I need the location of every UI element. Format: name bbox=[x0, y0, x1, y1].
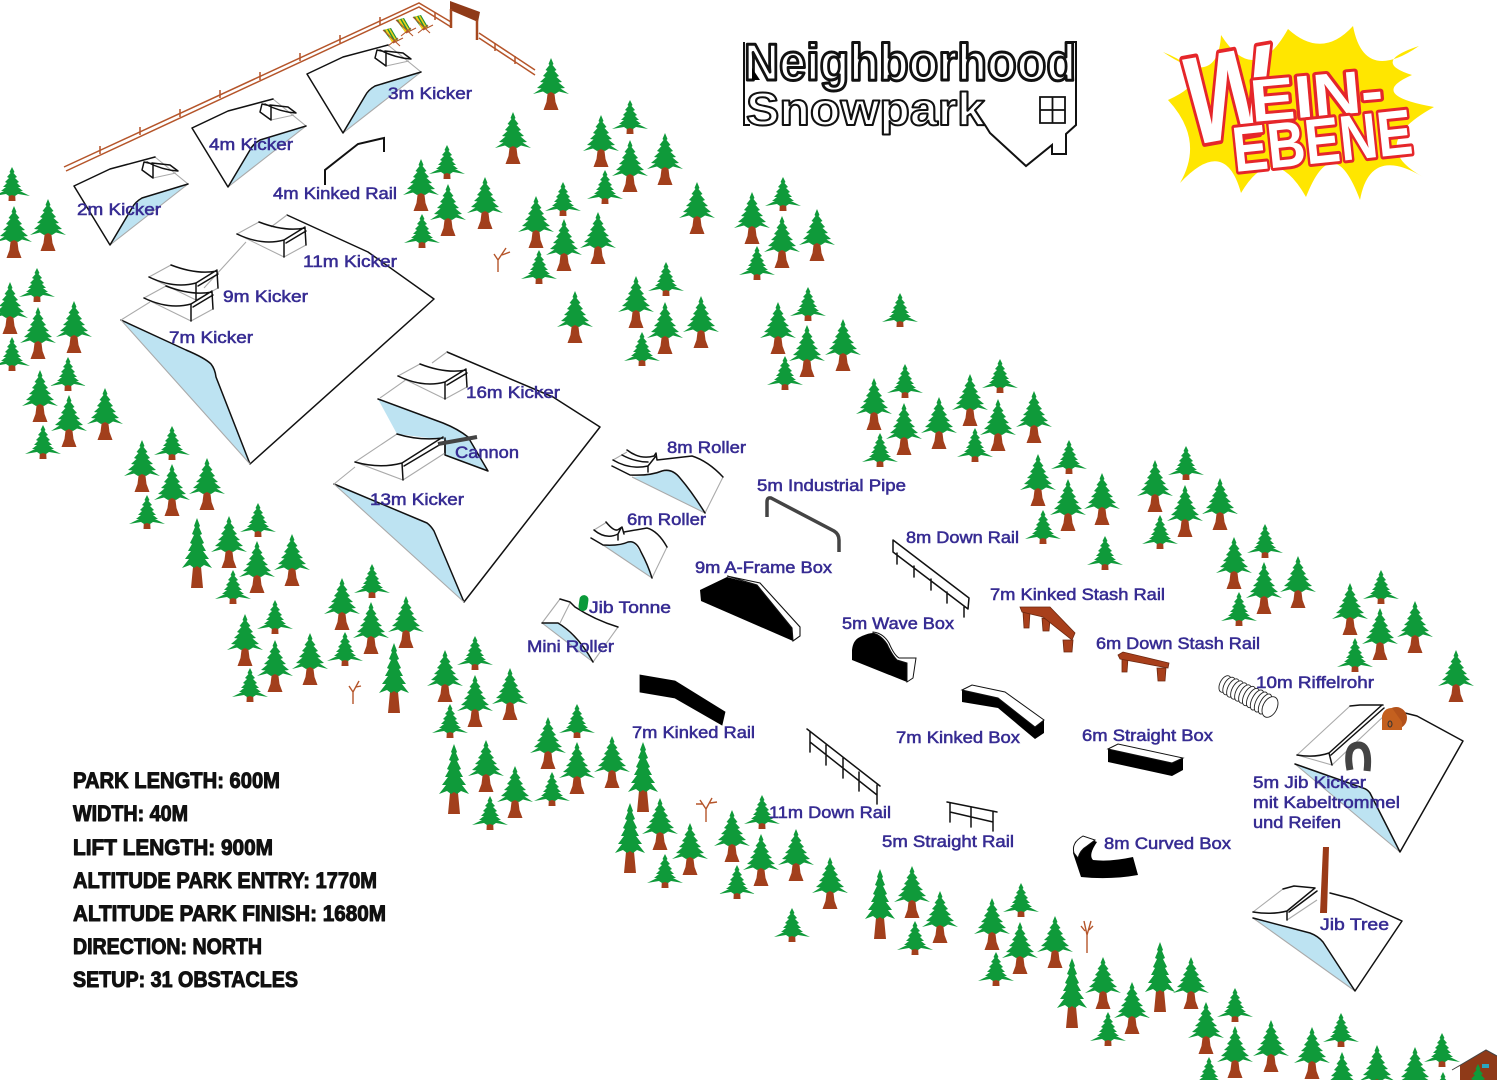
cannon landing bbox=[378, 399, 488, 471]
9m kicker bbox=[149, 265, 218, 300]
obstacle labels: Jib Tree bbox=[1320, 915, 1389, 934]
logo: Wein-Ebene: EBENE bbox=[1229, 96, 1415, 186]
obstacle labels: 2m Kicker bbox=[77, 200, 161, 219]
icon: 6m straight box bbox=[1108, 744, 1183, 776]
obstacle labels: 7m Kinked Rail bbox=[632, 723, 755, 742]
obstacle labels: 7m Kinked Box bbox=[896, 728, 1021, 747]
icon: cable drum bbox=[1382, 707, 1407, 730]
obstacle labels: 11m Down Rail bbox=[769, 803, 891, 822]
forest: bottom bbox=[615, 795, 1461, 1080]
16m kicker bbox=[398, 364, 467, 399]
entrance sign bbox=[450, 1, 480, 22]
park stats text block: WIDTH: 40M bbox=[73, 801, 188, 826]
icon: 8m curved box bbox=[1073, 836, 1138, 878]
park stats text block: DIRECTION: NORTH bbox=[73, 934, 262, 959]
icon: industrial pipe bbox=[767, 498, 839, 552]
icon: 7m kinked stash rail bbox=[1020, 607, 1075, 652]
icon: letter counters bbox=[752, 68, 760, 80]
park stats text block: ALTITUDE PARK FINISH: 1680M bbox=[73, 901, 386, 926]
obstacle labels: 3m Kicker bbox=[388, 84, 472, 103]
obstacle labels bbox=[77, 84, 1400, 934]
logo: Wein-Ebene: W bbox=[1180, 17, 1279, 173]
obstacle labels: 16m Kicker bbox=[466, 383, 560, 402]
obstacle labels: 13m Kicker bbox=[370, 490, 464, 509]
panel: 7m 9m 11m kicker area bbox=[121, 215, 434, 464]
icon: 8m down rail bbox=[893, 540, 969, 617]
panel: 5m jib kicker bbox=[1295, 705, 1463, 852]
obstacle labels: 5m Industrial Pipe bbox=[757, 476, 906, 495]
obstacle labels: 6m Straight Box bbox=[1082, 726, 1214, 745]
logo: Neighborhood Snowpark bbox=[744, 34, 1076, 166]
obstacle labels: 11m Kicker bbox=[303, 252, 397, 271]
park stats text block: ALTITUDE PARK ENTRY: 1770M bbox=[73, 868, 377, 893]
obstacle labels: 8m Down Rail bbox=[906, 528, 1019, 547]
panel: 13m 16m kicker area bbox=[334, 352, 600, 602]
obstacle labels: 7m Kicker bbox=[169, 328, 253, 347]
forest: top centre bbox=[403, 58, 918, 390]
13m kicker bbox=[355, 434, 446, 480]
obstacle labels: Mini Roller bbox=[527, 637, 614, 656]
icon: 5m wave box bbox=[852, 632, 916, 682]
forest: lower left bbox=[124, 426, 658, 830]
panel: mini roller bbox=[542, 595, 618, 662]
logo: Wein-Ebene bbox=[1163, 17, 1434, 200]
icon: 7m kinked box bbox=[962, 685, 1044, 739]
bare trees bbox=[349, 248, 1093, 953]
obstacle labels: Jib Tonne bbox=[589, 598, 671, 617]
icon: 11m down rail bbox=[807, 729, 880, 804]
obstacle labels: mit Kabeltrommel bbox=[1253, 793, 1400, 812]
7m kicker bbox=[144, 286, 213, 321]
logo: Wein-Ebene: EIN- bbox=[1247, 57, 1386, 135]
obstacle labels: 4m Kinked Rail bbox=[273, 184, 397, 203]
obstacle labels: 4m Kicker bbox=[209, 135, 293, 154]
logo: Neighborhood Snowpark: Snowpark bbox=[746, 83, 985, 135]
logo: Neighborhood Snowpark: Neighborhood bbox=[744, 34, 1076, 92]
icon: jib tonne barrel bbox=[578, 595, 589, 612]
obstacle labels: 10m Riffelrohr bbox=[1256, 673, 1374, 692]
obstacle labels: 5m Straight Rail bbox=[882, 832, 1014, 851]
obstacle labels: 8m Roller bbox=[667, 438, 746, 457]
icon: window bbox=[1040, 97, 1065, 123]
park stats text block: PARK LENGTH: 600M bbox=[73, 768, 280, 793]
icon: 7m kinked rail bbox=[640, 675, 725, 725]
panel: jib tree bbox=[1253, 847, 1402, 991]
obstacle labels: 5m Wave Box bbox=[842, 614, 955, 633]
panel: 8m roller bbox=[612, 450, 723, 513]
11m kicker bbox=[237, 222, 306, 257]
obstacle labels: 8m Curved Box bbox=[1104, 834, 1232, 853]
obstacle labels: 9m Kicker bbox=[223, 287, 308, 306]
park stats text block: SETUP: 31 OBSTACLES bbox=[73, 967, 298, 992]
icon: 6m down stash rail bbox=[1118, 652, 1169, 681]
icon: 10m riffelrohr bbox=[1216, 674, 1281, 720]
park stats text block: LIFT LENGTH: 900M bbox=[73, 835, 273, 860]
deck chairs bbox=[383, 15, 433, 46]
obstacle labels: 6m Down Stash Rail bbox=[1096, 634, 1260, 653]
icon: 9m a-frame box bbox=[700, 576, 800, 641]
panel: 6m roller bbox=[591, 522, 667, 578]
forest: left edge bbox=[0, 167, 123, 459]
panel: 3m kicker bbox=[307, 45, 421, 133]
obstacle labels: Cannon bbox=[455, 443, 519, 462]
forest: right slope bbox=[856, 359, 1474, 702]
obstacle labels: 7m Kinked Stash Rail bbox=[990, 585, 1165, 604]
panel: 2m kicker bbox=[74, 157, 188, 245]
icon: 4m kinked rail bbox=[325, 138, 384, 185]
obstacle labels: 5m Jib Kicker bbox=[1253, 773, 1366, 792]
obstacle labels: 9m A-Frame Box bbox=[695, 558, 833, 577]
icon: cannon pipe bbox=[438, 437, 477, 444]
panel: 4m kicker bbox=[192, 99, 306, 187]
icon: jib tree pole bbox=[1320, 847, 1329, 913]
fence and entrance bbox=[64, 1, 535, 171]
cabin bbox=[1452, 1050, 1497, 1080]
obstacle labels: und Reifen bbox=[1253, 813, 1341, 832]
icon: tyre bbox=[1349, 745, 1368, 771]
icon: 5m straight rail bbox=[947, 802, 997, 831]
obstacle labels: 6m Roller bbox=[627, 510, 706, 529]
park stats text block bbox=[73, 768, 386, 992]
